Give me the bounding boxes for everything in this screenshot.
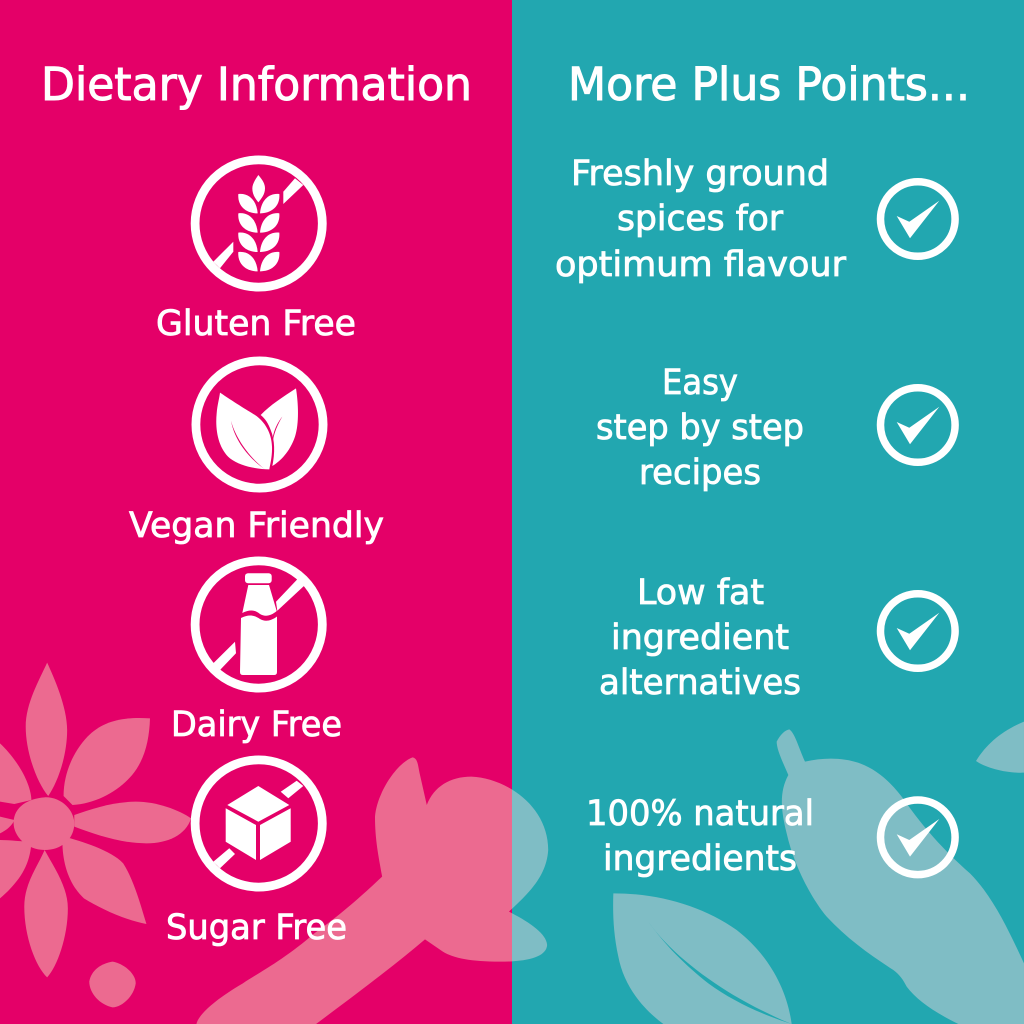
icon: vegan friendly [196,361,323,488]
text: easy recipes [596,363,804,493]
label: Sugar Free: Sugar Free [166,908,347,948]
text: low fat [599,573,801,703]
icon: check 1 [880,182,955,256]
panel: pink background [0,0,512,1024]
illustration: corner leaf [976,722,1024,773]
icon: check 3 [880,594,955,668]
heading: Dietary Information: Dietary Information [41,58,472,111]
label: Gluten Free: Gluten Free [156,304,356,344]
text: easy recipes: step by step [596,408,804,448]
icon: gluten free [195,160,322,287]
panel: teal background [512,0,1024,1024]
text: easy recipes: recipes [639,453,761,493]
heading: More Plus Points: More Plus Points... [568,58,970,111]
icon: sugar free [195,760,322,887]
label: Dairy Free: Dairy Free [171,705,342,745]
text: easy recipes: Easy [662,363,738,403]
illustration: clove [196,757,548,1024]
text: fresh spices: spices for [617,199,784,239]
label: Vegan Friendly: Vegan Friendly [129,506,384,546]
text: natural ingredients: 100% natural [586,794,814,834]
text: fresh spices: optimum flavour [555,245,847,285]
illustration: star anise flower [0,663,191,977]
text: low fat: ingredient [611,618,789,658]
icon: check 2 [880,388,955,462]
text: fresh spices: Freshly ground [571,154,829,194]
text: low fat: alternatives [599,663,801,703]
illustration: bottom leaf [613,893,792,1024]
icon: dairy free [195,561,322,688]
illustration: cardamom pod [777,729,1024,1024]
text: natural ingredients: ingredients [603,839,797,879]
icon: check 4 [880,800,955,875]
illustration: small seed [89,962,136,1007]
text: natural ingredients [586,794,814,879]
text: fresh spices [555,154,847,285]
text: low fat: Low fat [637,573,764,613]
